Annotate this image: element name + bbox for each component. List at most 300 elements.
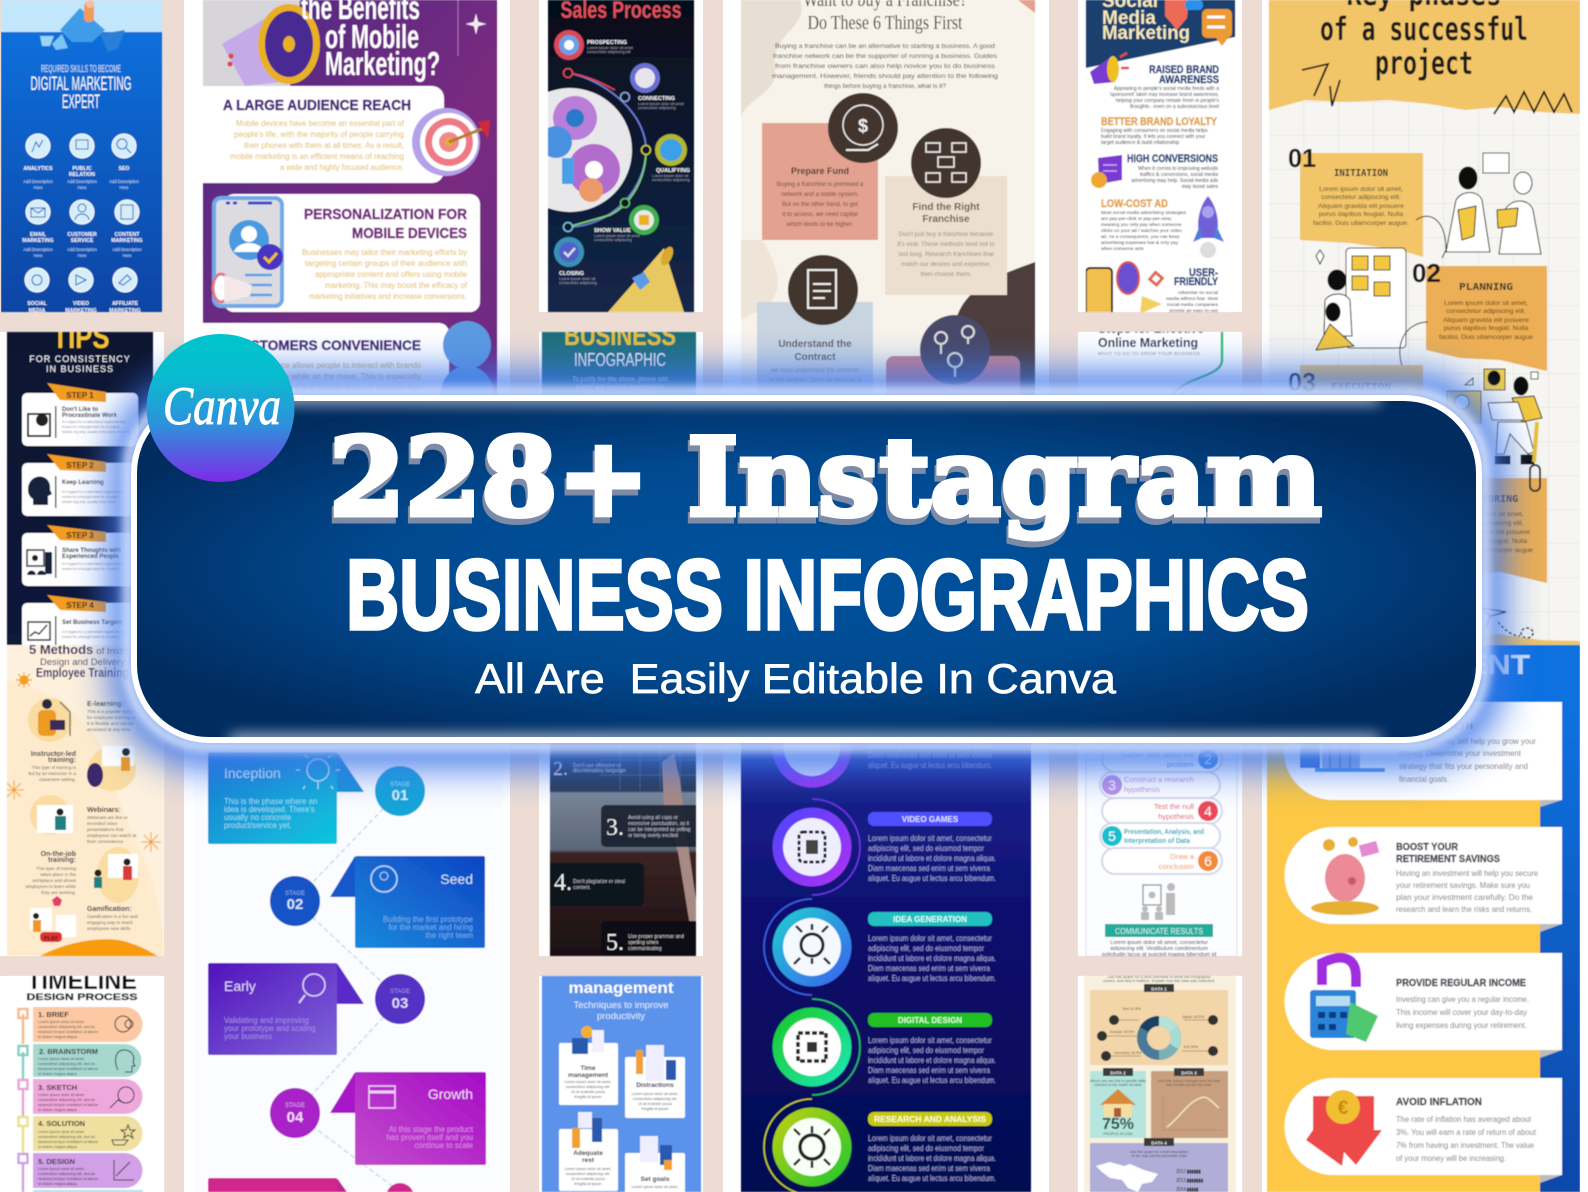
stage descriptions: consectetur adipiscing	[652, 178, 690, 182]
card: large audience reach: people's life, with the majority of people carrying	[234, 130, 404, 139]
logo: canva circle: Canva	[163, 376, 281, 436]
card: prepare fund: network and a stable system.	[781, 192, 859, 198]
step card 1: STEP 1	[66, 391, 94, 400]
section: user-friendly: FRIENDLY	[1174, 276, 1219, 288]
section: low-cost ad: advertising expenses low & only pay	[1101, 240, 1179, 246]
circle node	[1176, 391, 1204, 419]
data 1 card with donut: Japan 18.5%	[1182, 1015, 1205, 1019]
card: set goals: Lorem ipsum dolor sit amet,	[632, 1185, 678, 1189]
section: raised brand awareness: thoughts - even on a subconscious level	[1130, 104, 1219, 110]
card: find the right franchise: then choose them.	[921, 271, 972, 278]
card: find the right franchise: Find the Right	[912, 202, 980, 213]
card: adequate rest: Adequate	[573, 1150, 603, 1157]
step 02 planning: facilisi. Duis ullamcorper augue	[1439, 334, 1533, 341]
section: digital design: DIGITAL DESIGN	[898, 1016, 962, 1025]
card: avoid inflation: The rate of inflation has averaged about	[1396, 1114, 1532, 1124]
icon: calculator and cash	[1310, 958, 1378, 1042]
icon: yellow cone megaphone	[608, 245, 684, 312]
item: gamification	[30, 896, 138, 942]
step card 4: STEP 4	[66, 601, 94, 610]
section: high conversions: HIGH CONVERSIONS	[1127, 153, 1218, 165]
step 01 initiation: Lorem ipsum dolor sit amet,	[1319, 186, 1403, 193]
card: provide regular income	[1284, 953, 1562, 1058]
stage badge 02	[270, 876, 320, 926]
step card 3: A it regard for a calendared organizational	[62, 562, 125, 566]
data 3 card with line chart	[1151, 1068, 1228, 1138]
icon: chat bubbles	[1165, 0, 1232, 46]
item: on-the-job training: takes place in the	[40, 872, 76, 877]
section: user-friendly: social media companies	[1167, 302, 1219, 308]
step 1 brief: eiusmod tempor incididunt ut labore	[38, 1030, 98, 1034]
card: grow wealth: financial goals.	[1399, 774, 1449, 784]
logo: canva circle	[146, 334, 294, 482]
step 4 pill: 4	[1204, 803, 1212, 819]
stage labels: PROSPECTING	[587, 40, 627, 46]
data 2 card with house: PEOPLE IN USA	[1104, 1132, 1133, 1136]
section: low-cost ad: ad. As a consequence, you can keep	[1101, 234, 1180, 240]
title: tips: TIPS	[52, 319, 110, 355]
stage: growth: continue to scale	[414, 1141, 473, 1150]
card: boost retirement savings: research and learn the risks and returns.	[1396, 904, 1532, 914]
card: distractions: consectetur adipiscing elit.	[633, 1097, 677, 1101]
section: raised brand awareness: RAISED BRAND	[1149, 64, 1219, 76]
section: digital design	[868, 1013, 996, 1085]
data 4 card with map: 2012 ▮▮▮▮▮▮	[1176, 1169, 1201, 1175]
stage labels: SHOW VALUE	[594, 228, 631, 234]
stage descriptions: consectetur adipiscing elit	[587, 50, 631, 54]
skill labels: VIDEO	[73, 301, 89, 307]
tip box 3: excessive punctuation, as it	[628, 821, 690, 827]
tip box 3: 3.	[606, 815, 624, 841]
panel: time management	[542, 976, 701, 1192]
icon: sparkle	[458, 0, 486, 56]
step 4 solution: et dolore magna aliqua.	[38, 1145, 78, 1149]
card: prepare fund	[762, 123, 878, 240]
step 2 brainstorm: 2. BRAINSTORM	[39, 1047, 98, 1056]
skill labels: MARKETING	[22, 238, 54, 244]
section: research and analysis: aliquet. Eu augue ut lectus arcu bibendum.	[868, 1173, 996, 1183]
step card 2: stream reg only, usually every week.	[62, 500, 117, 504]
title: online marketing: Steps for Effective	[1098, 322, 1204, 336]
card: provide regular income: This income will cover your day-to-day	[1396, 1007, 1528, 1017]
tip 2: 2.	[553, 758, 568, 780]
section: video games: Lorem ipsum dolor sit amet, consectetur	[868, 833, 992, 843]
orange wave	[40, 939, 158, 956]
data 2 card with house: 75%	[1102, 1116, 1134, 1133]
photo: hand	[662, 754, 696, 926]
card: customers convenience: and businesses while on the move. This is especially	[234, 372, 421, 381]
card: grow wealth: Investing money will help you grow your	[1399, 736, 1536, 746]
card: find the right franchise: Franchise	[922, 214, 970, 225]
card: understand the contract: of the contract. Don't let there be a	[769, 378, 862, 384]
step card 3: STEP 3	[66, 531, 94, 540]
item: webinars: recorded video	[87, 821, 118, 826]
card: boost retirement savings: RETIREMENT SAVINGS	[1396, 853, 1500, 865]
title: online marketing: Online Marketing	[1098, 336, 1198, 350]
heading: required skills: DIGITAL MARKETING	[30, 74, 132, 95]
step 3 sketch: et dolore magna aliqua.	[38, 1108, 78, 1112]
section: low-cost ad: clicks on your ad / watches your video	[1101, 228, 1182, 234]
decorative beige corner shape	[741, 0, 802, 120]
card: prepare fund: Prepare Fund	[791, 166, 849, 176]
section: raised brand awareness: AWARENESS	[1159, 74, 1219, 86]
step 4 solution: eiusmod tempor incididunt ut labore	[38, 1140, 98, 1144]
stage: inception	[208, 752, 364, 844]
step card 1: review for a thought work for a subject.	[62, 425, 120, 429]
icon grid: skills	[25, 134, 139, 292]
icon: sunburst right	[141, 832, 161, 852]
icon: dollar hand circle	[828, 93, 898, 163]
icon: blue person	[442, 320, 492, 395]
icon: presenter gray	[1141, 883, 1175, 920]
card: customers convenience	[202, 322, 450, 395]
skill descriptions: Here	[77, 185, 87, 190]
stage: seed: Building the first prototype	[383, 915, 473, 924]
icon: target with arrow	[412, 108, 490, 176]
dashed connector	[295, 791, 400, 1192]
step card 1: A it regard for a calendared organizational	[62, 420, 125, 424]
card: time management: Lorem ipsum dolor sit amet,	[565, 1080, 611, 1084]
card: understand the contract	[757, 302, 873, 422]
tip 2: Don't use offensive or	[573, 763, 621, 769]
title: 228+ Instagram: 228+ Instagram	[327, 421, 1320, 547]
body text: adipiscing elit. Vestibulum condimentum	[1110, 946, 1208, 952]
card: adequate rest: fringilla id ipsum	[574, 1182, 602, 1186]
subtitle: for consistency in business: FOR CONSISTENCY	[29, 354, 131, 364]
section: digital design: Diam maecenas sed enim ut sem viverra	[868, 1065, 990, 1075]
item: webinars: Webinars:	[87, 807, 121, 814]
step 2 pill: Gather data about the	[1121, 750, 1194, 759]
section: high conversions: When it comes to improving website	[1138, 166, 1218, 172]
subtitle: for consistency in business	[29, 354, 131, 374]
tip 2	[553, 758, 626, 780]
data 1 card with donut	[1090, 984, 1228, 1065]
section: research and analysis: incididunt ut labore et dolore magna aliqua.	[868, 1153, 996, 1163]
panel: startup stages	[194, 720, 503, 1192]
step 04 monitoring: is feugiat. Nulla	[1482, 538, 1527, 545]
card: prepare fund: Buying a franchise is premised a	[777, 182, 864, 188]
stage: early: Early	[224, 978, 256, 994]
stage descriptions: Lorem ipsum dolor sit amet	[587, 46, 634, 50]
section: raised brand awareness: 'sponsored' label may increase brand awareness,	[1110, 92, 1219, 98]
section: low-cost ad: when someone acts	[1101, 246, 1144, 252]
stage: next (pink)	[208, 1178, 414, 1192]
subtitle: techniques: productivity	[597, 1011, 645, 1022]
step 6 pill: conclusion	[1159, 862, 1194, 871]
card: time management: Time	[580, 1065, 596, 1072]
section: video games: Diam maecenas sed enim ut sem viverra	[868, 863, 990, 873]
section: digital design: aliquet. Eu augue ut lectus arcu bibendum.	[868, 1075, 996, 1085]
section: idea generation: adipiscing elit, sed do eiusmod tempor	[868, 943, 984, 953]
item: instructor-led training: led by an instructor in a	[28, 771, 76, 776]
intro text: covers, and why it matters. Explain how the data was collected.	[1103, 978, 1215, 983]
skill labels: SOCIAL	[27, 301, 48, 307]
tip box 3: can be interpreted as yelling	[628, 827, 691, 833]
step card 2: review for a thought work for a subject.	[62, 495, 120, 499]
skill labels: MARKETING	[111, 238, 143, 244]
icon: stores circle	[911, 128, 981, 198]
section: idea generation: Lorem ipsum dolor sit amet, consectetur	[868, 933, 992, 943]
step 02 planning: purus dapibus feugiat. Nulla	[1444, 325, 1528, 332]
tip box 4: 4.	[554, 870, 572, 896]
card: grow wealth: strategy that fits your personality and	[1399, 761, 1528, 771]
step 04 monitoring	[1420, 478, 1547, 583]
title: social media marketing: Marketing	[1102, 23, 1190, 44]
step card 4: A it regard for a calendared organizational	[62, 630, 125, 634]
step card 4: review for a thought work for a subject.	[62, 635, 120, 639]
stage: seed: the right team	[425, 931, 473, 940]
intro paragraph: Buying a franchise can be an alternative to starting a business. A good	[775, 43, 995, 50]
tagline: all are easily editable in canva: All Are Easily Editable In Canva	[475, 655, 1117, 702]
item: e-learning: This is a popular option	[87, 709, 135, 714]
step 2 pill	[1102, 746, 1222, 772]
card: adequate rest: consectetur adipiscing elit.	[566, 1172, 610, 1176]
decorative pink corner	[1018, 0, 1035, 13]
intro text	[1103, 974, 1215, 983]
tip box 5: 5.	[606, 930, 624, 956]
step 04 monitoring: llamcorper augue	[1482, 547, 1533, 554]
subtitle: WHAT TO DO TO GROW YOUR BUSINESS	[1098, 351, 1200, 356]
title: want to buy a franchise: Do These 6 Things First	[808, 12, 963, 34]
card: boost retirement savings	[1284, 827, 1562, 932]
tip box 5: spelling when	[628, 940, 659, 946]
section: video games: aliquet. Eu augue ut lectus arcu bibendum.	[868, 873, 996, 883]
step 3 pill: hypothesis	[1124, 785, 1160, 794]
connector line	[18, 1009, 28, 1192]
stage: early: Validating and improving	[224, 1016, 309, 1025]
item: instructor-led training: This type of training is	[31, 765, 77, 770]
stage descriptions: Lorem ipsum dolor sit amet	[638, 102, 685, 106]
intro paragraph: management. However, friends should pay attention to the following	[772, 73, 998, 80]
subtitle: design process: DESIGN PROCESS	[26, 992, 138, 1002]
node: idea generation ring	[772, 908, 852, 986]
item: gamification: employees new skills.	[87, 926, 131, 931]
heading: ment: MENT	[1440, 649, 1530, 680]
item: instructor-led training: classroom setting.	[39, 777, 76, 782]
card: personalization: appropriate content and offers using mobile	[315, 270, 468, 279]
torn yellow strip	[1420, 634, 1580, 645]
section: better brand loyalty	[1101, 116, 1218, 146]
tip 2: discriminatory language	[573, 768, 626, 774]
title: social media marketing: Media	[1102, 8, 1156, 29]
card: prepare fund: But on the other hand, to get	[782, 202, 858, 208]
item: e-learning	[28, 698, 137, 742]
data 4 card with map: Use this space for a brief description	[1130, 1150, 1188, 1154]
body text: Lorem ipsum dolor sit amet, consectetur	[1110, 940, 1208, 946]
data 1 card with donut: Europe 18.5%	[1110, 1030, 1135, 1034]
section: raised brand awareness: Appearing in people's social media feeds with a	[1114, 86, 1219, 92]
card: provide regular income: living expenses during your retirement.	[1396, 1020, 1527, 1030]
stage badge 03: STAGE	[390, 989, 410, 995]
intro text: Use this space for a brief overview of what this infographic	[1107, 974, 1211, 979]
step 01 initiation	[1288, 143, 1423, 257]
item: e-learning: E-learning:	[87, 701, 124, 708]
card: understand the contract: we must understand the contents	[770, 368, 859, 374]
step 5 pill	[1100, 823, 1220, 849]
skill labels: MARKETING	[109, 308, 141, 314]
item: on-the-job training	[25, 847, 139, 903]
section: better brand loyalty: target audience & build relationship	[1101, 140, 1179, 146]
section: high conversions: traffics & conversions, social media	[1140, 172, 1218, 178]
section: better brand loyalty: Engaging with consumers on social media helps	[1101, 128, 1208, 134]
stage badge 04: 04	[287, 1109, 304, 1126]
timeline arc	[568, 73, 646, 227]
card: personalization: targeting certain groups of their audience with	[305, 259, 467, 268]
card: grow wealth: money. Determine your investment	[1399, 748, 1522, 758]
card: grow wealth: WEALTH	[1431, 721, 1473, 732]
card: avoid inflation: 3%. You will earn a rate of return of about	[1396, 1127, 1537, 1137]
card: adequate rest: Lorem ipsum dolor sit amet,	[565, 1167, 611, 1171]
card: grow wealth	[1284, 702, 1562, 807]
section: idea generation: Diam maecenas sed enim ut sem viverra	[868, 963, 990, 973]
data 3 card with line chart: How this source changed over the past	[1158, 1079, 1220, 1083]
section: raised brand awareness	[1110, 64, 1219, 110]
panel: digital marketing expert	[1, 0, 162, 314]
section: video games	[868, 812, 996, 883]
step 03 execution: EXECUTION	[1331, 382, 1391, 393]
decorative pink card	[886, 356, 1020, 426]
skill labels: MARKETING	[65, 308, 97, 314]
step card 1	[22, 383, 138, 446]
card: boost retirement savings: plan your investment carefully. Do the	[1396, 892, 1533, 902]
step 3 sketch: Lorem ipsum dolor sit amet,	[38, 1093, 85, 1097]
decorative dark blob	[950, 262, 1035, 420]
title: 5 methods	[29, 642, 151, 680]
step 01 initiation: purus dapibus feugiat. Nulla	[1319, 211, 1403, 218]
step 01 initiation: 01	[1288, 143, 1316, 173]
decorative cream hill	[7, 680, 164, 956]
card: boost retirement savings: your retirement savings. Make sure you	[1396, 880, 1530, 890]
stage badge 04: STAGE	[285, 1103, 305, 1109]
node: video games ring	[772, 808, 852, 886]
stage descriptions	[559, 46, 690, 285]
icon: dollar hand circle: $	[858, 116, 868, 136]
step 5 design: Lorem ipsum dolor sit amet,	[38, 1167, 85, 1171]
card: large audience reach: Mobile devices have become an essential part of	[236, 119, 405, 128]
icon: piggy bank	[1311, 837, 1379, 915]
skill labels: AFFILIATE	[112, 301, 139, 307]
tip box 4: content.	[573, 885, 591, 891]
intro paragraph	[772, 43, 998, 90]
step 5 design: 5. DESIGN	[38, 1157, 75, 1166]
panel: key phases of a successful project	[1269, 0, 1580, 645]
step card 2: A it regard for a calendared organizational	[62, 490, 125, 494]
tip box 4: Don't plagiarize or steal	[573, 879, 625, 885]
skill descriptions: Add Description	[23, 179, 53, 184]
item: e-learning: accessed at any time.	[87, 727, 131, 732]
stage: early: your business	[224, 1032, 272, 1041]
panel: social media marketing	[1086, 0, 1235, 316]
step 02 planning: Aliquam gravida elit posuere	[1443, 317, 1529, 324]
card: avoid inflation	[1284, 1078, 1562, 1183]
step 2 brainstorm: eiusmod tempor incididunt ut labore	[38, 1067, 98, 1071]
card: prepare fund: it to access, we need capital	[782, 212, 858, 218]
item: on-the-job training: they are working.	[41, 890, 76, 895]
section: digital design: incididunt ut labore et dolore magna aliqua.	[868, 1055, 996, 1065]
icon pins	[554, 30, 687, 267]
step 2 pill: problem	[1167, 760, 1194, 769]
card: distractions: Distractions	[636, 1082, 674, 1089]
card: avoid inflation: 7% from having an investment. The value	[1396, 1140, 1534, 1150]
band: communicate results	[1105, 924, 1213, 937]
skill descriptions	[23, 179, 142, 258]
item: gamification: Gamification:	[87, 906, 132, 913]
step 04 monitoring: dolor sit amet,	[1482, 511, 1524, 518]
stage badge 03: 03	[392, 995, 408, 1012]
data 3 card with line chart: DATA 3	[1181, 1070, 1197, 1076]
step 4 pill: Test the null	[1154, 802, 1194, 811]
card: time management	[559, 1026, 618, 1105]
text block above: incididunt ut labore et dolore magna aliqua.	[868, 740, 992, 750]
section: low-cost ad: are pay-per-click or pay-per-view,	[1101, 216, 1172, 222]
panel: 5 methods of employee training	[4, 642, 164, 956]
title: the benefits of mobile marketing: Marketing?	[325, 45, 440, 82]
card: boost retirement savings: BOOST YOUR	[1396, 841, 1458, 853]
stage descriptions: consectetur adipiscing	[594, 238, 632, 242]
band: communicate results: COMMUNICATE RESULTS	[1115, 927, 1203, 936]
icon: yellow megaphone	[222, 4, 320, 86]
panel: timeline design process	[7, 968, 164, 1192]
data 1 card with donut: Text 10.5%	[1122, 1007, 1141, 1011]
item: webinars: their convenience.	[87, 839, 124, 844]
step 4 pill	[1102, 798, 1222, 824]
body text: solicitudin lacus at suscipit magna bibendum id	[1102, 952, 1216, 958]
item: on-the-job training: This type of training	[36, 866, 76, 871]
skill descriptions: Add Description	[23, 247, 53, 252]
card: time management: fringilla id ipsum	[574, 1095, 602, 1099]
card: large audience reach: their phones with them at all times. As a result,	[244, 141, 404, 150]
step 01 initiation: INITIATION	[1334, 168, 1388, 179]
stage labels: CONNECTING	[638, 96, 675, 102]
step 5 pill: Presentation, Analysis, and	[1124, 829, 1204, 836]
card: understand the contract: Contract	[794, 352, 836, 363]
section: better brand loyalty: BETTER BRAND LOYALTY	[1101, 116, 1218, 128]
section: digital design: Lorem ipsum dolor sit amet, consectetur	[868, 1035, 992, 1045]
card: provide regular income: Investing can give you a regular income.	[1396, 994, 1529, 1004]
panel: writing tips on laptop photo	[545, 720, 701, 961]
icon: sunburst top	[16, 672, 32, 688]
tip box 3	[601, 805, 701, 847]
step 02 planning	[1412, 258, 1547, 371]
tip box 5: communicating	[628, 946, 662, 952]
heading: required skills: REQUIRED SKILLS TO BECOME	[41, 64, 121, 75]
card: set goals	[625, 1136, 685, 1192]
card: personalization: marketing initiatives and increase conversions.	[309, 292, 467, 301]
section: user-friendly	[1166, 267, 1219, 314]
item: e-learning: it is flexible and can be	[87, 721, 134, 726]
step 4 pill: hypothesis	[1158, 812, 1194, 821]
stage: growth: has proven itself and you	[386, 1133, 473, 1142]
stage badge 01: STAGE	[390, 782, 410, 788]
card: adequate rest: rest	[582, 1157, 595, 1164]
skill descriptions: Here	[122, 253, 132, 258]
stage: inception: idea is developed. There's	[224, 805, 315, 814]
step 1 brief: Lorem ipsum dolor sit amet,	[38, 1020, 85, 1024]
section: low-cost ad: LOW-COST AD	[1101, 198, 1168, 210]
section: high conversions: may boost sales	[1182, 184, 1218, 190]
step 5 design: et dolore magna aliqua.	[38, 1182, 78, 1186]
step card 3	[22, 525, 138, 586]
card: set goals: Set goals	[641, 1176, 670, 1183]
card: find the right franchise: it's viral. These methods tend not to	[897, 241, 995, 248]
title: want to buy a franchise	[803, 0, 967, 34]
circle with gears	[547, 87, 633, 213]
illustration: two women with papers	[1416, 153, 1541, 258]
data 4 card with map: 2013 ▮▮▮▮▮▮▮	[1176, 1178, 1204, 1184]
icon: phone with profile and megaphone	[213, 198, 283, 306]
card: personalization: PERSONALIZATION FOR	[304, 206, 467, 223]
step 03 execution: 03	[1288, 367, 1316, 397]
